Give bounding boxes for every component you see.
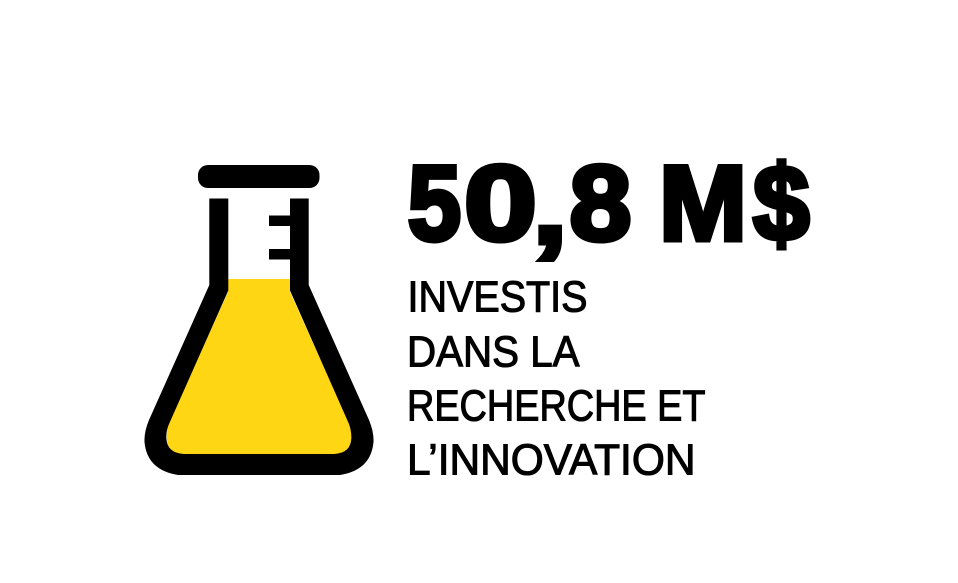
- headline amount: $: [753, 143, 810, 263]
- line: RECHERCHE ET: RECHERCHE ET: [407, 383, 706, 431]
- flask liquid: [167, 279, 351, 454]
- flask measure tick upper: [269, 216, 291, 226]
- description text: [407, 274, 706, 484]
- headline amount: 5: [408, 143, 461, 263]
- icon: flask with yellow liquid: [144, 165, 374, 475]
- line: L'INNOVATION: L’INNOVATION: [407, 436, 696, 484]
- headline amount: 8: [570, 143, 632, 263]
- headline amount: M: [659, 143, 747, 263]
- flask cap: [198, 165, 320, 188]
- headline amount: ,: [532, 146, 568, 266]
- flask measure tick lower: [269, 249, 291, 260]
- flask body outline: [144, 198, 374, 475]
- headline amount: 0: [464, 143, 537, 263]
- line: DANS LA: DANS LA: [407, 329, 580, 377]
- line: INVESTIS: INVESTIS: [408, 274, 588, 322]
- headline amount: [408, 143, 810, 266]
